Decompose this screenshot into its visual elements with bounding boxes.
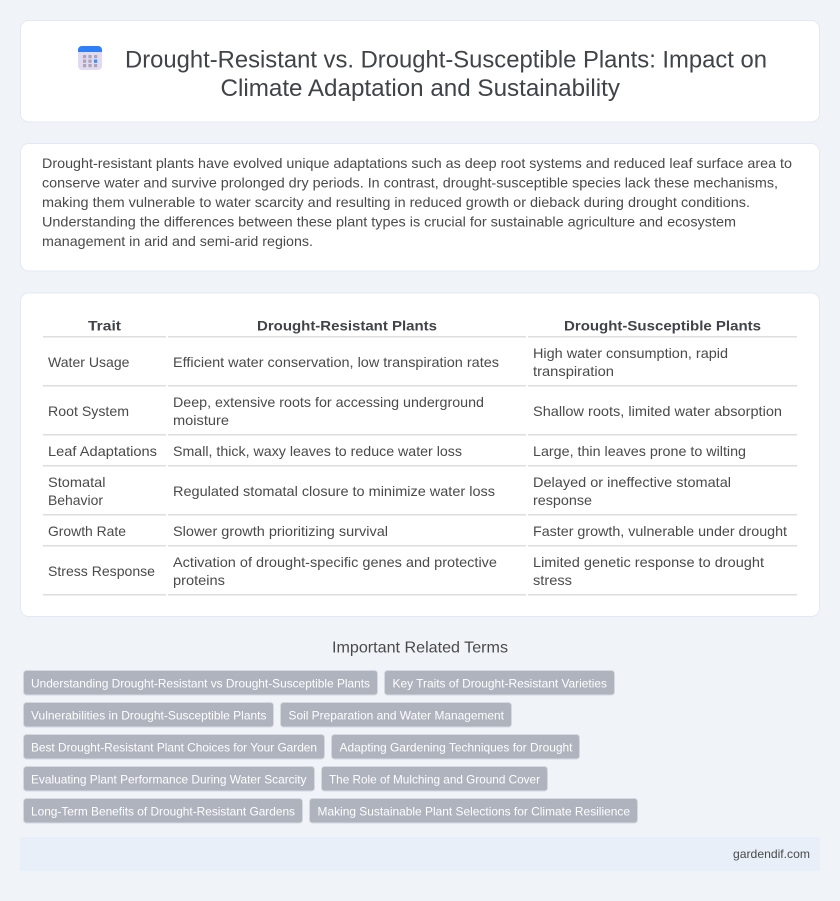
row: stomatal behavior bbox=[48, 474, 731, 508]
row: stress response: proteins bbox=[173, 572, 225, 588]
chip: Key Traits of Drought-Resistant Varieties bbox=[392, 676, 607, 690]
row: leaf adaptations: Large, thin leaves prone to wilting bbox=[533, 443, 746, 459]
icon: calendar bbox=[78, 46, 102, 70]
chip: The Role of Mulching and Ground Cover bbox=[329, 772, 540, 786]
title: Climate Adaptation and Sustainability bbox=[220, 75, 620, 102]
row: stress response: Activation of drought-specific genes and protective bbox=[173, 554, 497, 570]
chip: Vulnerabilities in Drought-Susceptible Plants bbox=[31, 708, 266, 722]
panel: introduction text: making them vulnerable to water scarcity and resulting in reduced growth or dieback during drought conditions. bbox=[42, 194, 750, 210]
chip: Adapting Gardening Techniques for Drought bbox=[340, 740, 573, 754]
chip: Making Sustainable Plant Selections for Climate Resilience bbox=[318, 804, 630, 818]
table header: Drought-Susceptible Plants bbox=[564, 318, 761, 334]
row: growth rate: Growth Rate bbox=[48, 523, 126, 539]
chip: Understanding Drought-Resistant vs Drought-Susceptible Plants bbox=[31, 676, 370, 690]
footer: gardendif.com bbox=[733, 847, 810, 861]
row: stomatal behavior: Behavior bbox=[48, 492, 103, 508]
panel: related term chips bbox=[24, 670, 638, 823]
row: water usage: Water Usage bbox=[48, 354, 130, 370]
row: stomatal behavior: response bbox=[533, 492, 592, 508]
title bbox=[125, 46, 767, 102]
heading: important related terms: Important Related Terms bbox=[332, 640, 508, 657]
chip bbox=[384, 670, 614, 695]
row: root system: Root System bbox=[48, 403, 129, 419]
row: root system bbox=[48, 394, 782, 428]
row: stress response: stress bbox=[533, 572, 572, 588]
row: stomatal behavior: Delayed or ineffective stomatal bbox=[533, 474, 731, 490]
row: water usage: Efficient water conservation, low transpiration rates bbox=[173, 354, 499, 370]
row: root system: moisture bbox=[173, 412, 229, 428]
panel: introduction text: Understanding the differences between these plant types is crucial for sustainable agriculture and ecosystem bbox=[42, 214, 736, 230]
panel: introduction text bbox=[20, 144, 820, 271]
row: stress response: Stress Response bbox=[48, 563, 155, 579]
table header: Drought-Resistant Plants bbox=[257, 318, 437, 334]
row: leaf adaptations: Small, thick, waxy leaves to reduce water loss bbox=[173, 443, 462, 459]
row: growth rate: Slower growth prioritizing survival bbox=[173, 523, 388, 539]
row: root system: Deep, extensive roots for accessing underground bbox=[173, 394, 484, 410]
row: stress response: Limited genetic response to drought bbox=[533, 554, 764, 570]
row: growth rate: Faster growth, vulnerable under drought bbox=[533, 523, 787, 539]
table header: Trait bbox=[88, 318, 121, 334]
row: stomatal behavior: Regulated stomatal closure to minimize water loss bbox=[173, 483, 495, 499]
row: water usage: transpiration bbox=[533, 363, 614, 379]
table header bbox=[88, 318, 761, 334]
chip: Evaluating Plant Performance During Water Scarcity bbox=[31, 772, 306, 786]
chip bbox=[24, 702, 274, 727]
row: leaf adaptations bbox=[48, 443, 746, 459]
chip bbox=[310, 798, 638, 823]
chip bbox=[280, 702, 512, 727]
chip bbox=[24, 734, 324, 759]
row: growth rate bbox=[48, 523, 787, 539]
row: root system: Shallow roots, limited water absorption bbox=[533, 403, 782, 419]
panel: introduction text: Drought-resistant plants have evolved unique adaptations such as deep root systems and reduced leaf surface area to bbox=[42, 155, 792, 171]
panel: introduction text: conserve water and survive prolonged dry periods. In contrast, drought-susceptible species lack these mechanisms, bbox=[42, 174, 778, 190]
chip bbox=[322, 766, 548, 791]
chip bbox=[332, 734, 580, 759]
row: water usage bbox=[48, 345, 728, 379]
row: stomatal behavior: Stomatal bbox=[48, 474, 106, 490]
panel: introduction text: management in arid and semi-arid regions. bbox=[42, 233, 313, 249]
row: leaf adaptations: Leaf Adaptations bbox=[48, 443, 157, 459]
chip: Long-Term Benefits of Drought-Resistant Gardens bbox=[31, 804, 295, 818]
panel: comparison table bbox=[20, 293, 820, 616]
chip bbox=[24, 798, 302, 823]
title: Drought-Resistant vs. Drought-Susceptible Plants: Impact on bbox=[125, 46, 767, 74]
chip bbox=[24, 766, 314, 791]
chip: Best Drought-Resistant Plant Choices for Your Garden bbox=[31, 740, 317, 754]
panel: header bbox=[20, 20, 820, 122]
row: water usage: High water consumption, rapid bbox=[533, 345, 728, 361]
row: stress response bbox=[48, 554, 764, 588]
footer bbox=[20, 837, 820, 871]
chip bbox=[24, 670, 378, 695]
chip: Soil Preparation and Water Management bbox=[288, 708, 505, 722]
